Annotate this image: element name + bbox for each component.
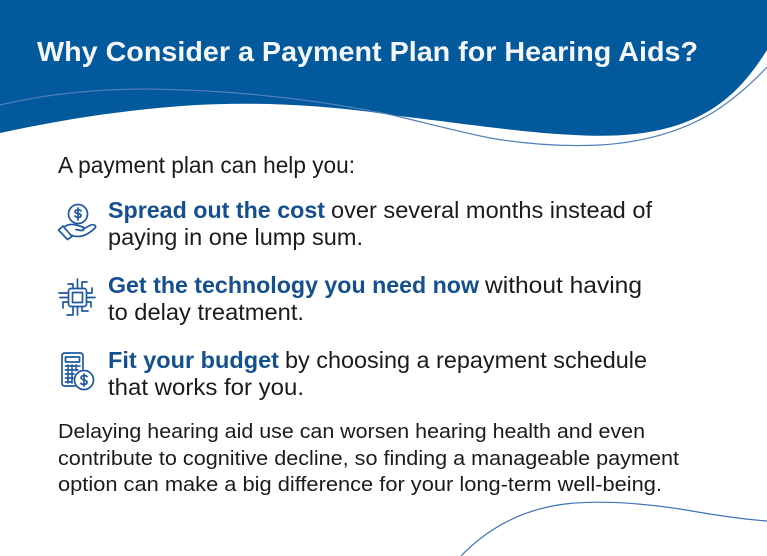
closing paragraph: contribute to cognitive decline, so finding a manageable payment [58,448,679,470]
benefit 2: without having [484,272,642,298]
benefit 3 text: Fit your budget [108,347,279,373]
intro text: A payment plan can help you: [58,152,355,178]
benefit 1 [58,197,653,250]
benefit 1 text: Spread out the cost [108,197,325,223]
benefit 3 [62,347,647,400]
benefit 2 text: Get the technology you need now [108,272,479,298]
title: Why Consider a Payment Plan for Hearing Aids? [37,36,698,67]
bottom decorative curve [461,502,767,556]
benefit 1: paying in one lump sum. [108,224,363,250]
benefit 3: by choosing a repayment schedule [285,347,647,373]
benefit 3: that works for you. [108,374,304,400]
closing paragraph: Delaying hearing aid use can worsen hearing health and even [58,421,645,443]
benefit 2: to delay treatment. [108,299,304,325]
icon: microchip [59,279,95,315]
icon: calculator with dollar coin [62,353,94,390]
closing paragraph [58,421,679,496]
closing paragraph: option can make a big difference for your long-term well-being. [58,474,662,496]
icon: hand holding coin [58,204,96,240]
header banner [0,0,767,146]
benefit 2 [59,272,642,325]
benefit 1: over several months instead of [331,197,653,223]
